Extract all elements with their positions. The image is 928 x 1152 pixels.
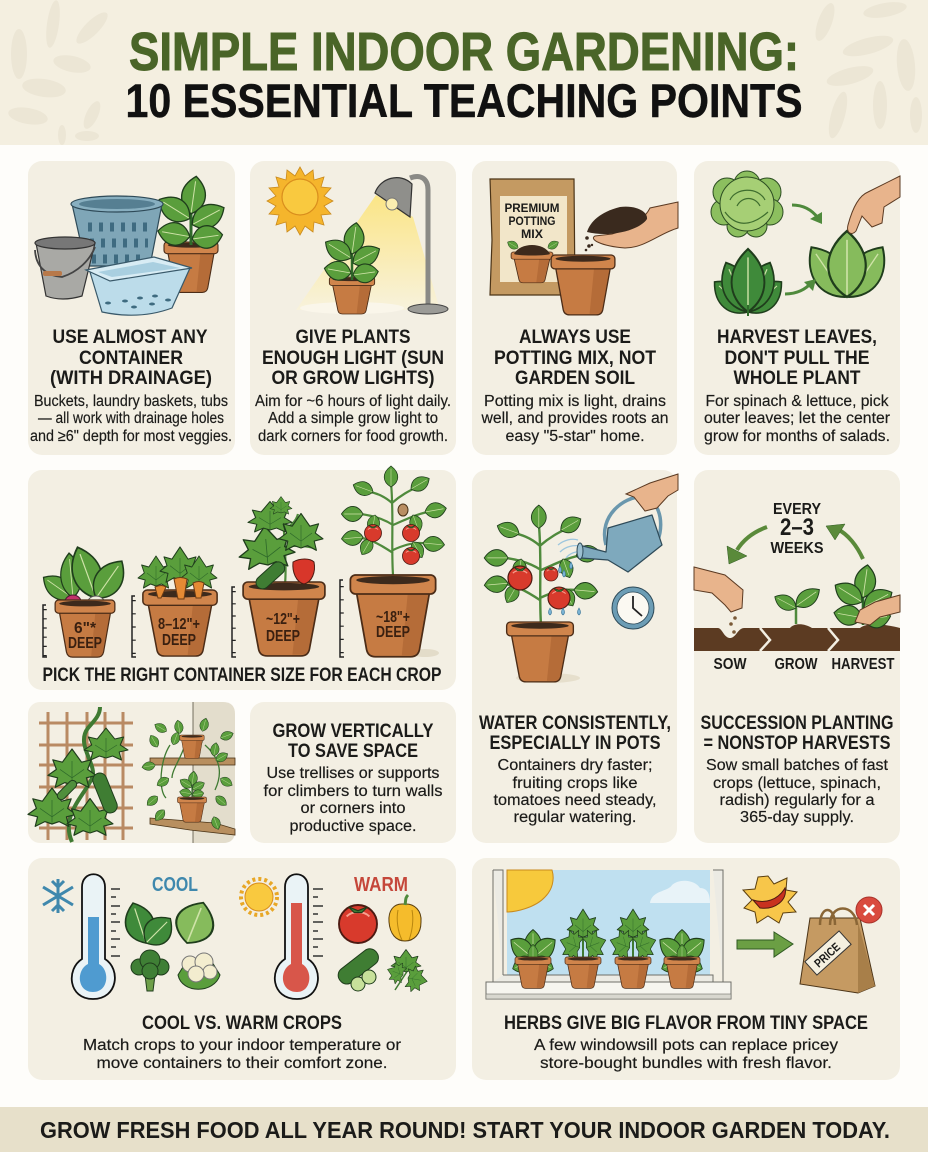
heading: = NONSTOP HARVESTS: [704, 733, 890, 754]
body text: and ≥6" depth for most veggies.: [30, 428, 232, 445]
pot: 8-12 inch: 8–12"+: [158, 616, 200, 633]
icon: window with herbs: [486, 870, 731, 999]
soil strip: [694, 624, 900, 651]
heading: GROW VERTICALLY: [272, 721, 434, 742]
body text: Containers dry faster;: [498, 757, 652, 774]
body text: Add a simple grow light to: [268, 410, 438, 427]
body text: [255, 393, 451, 445]
heading: CONTAINER: [79, 348, 183, 369]
icon: cool thermometer: [72, 874, 120, 999]
panel: succession planting: [694, 470, 900, 843]
icon: shopping bag with price tag: [800, 897, 882, 993]
pot: 12 inch: [232, 496, 325, 657]
icon: clock: [612, 587, 654, 629]
labels: sow grow harvest: [714, 656, 895, 673]
panel: harvest leaves: [694, 161, 900, 455]
heading: (WITH DRAINAGE): [50, 368, 212, 389]
body text: [534, 1037, 838, 1072]
arrow: lettuce to leaves: [792, 205, 822, 224]
labels: sow grow harvest: SOW: [714, 656, 747, 673]
icon: romaine leaves: [798, 231, 896, 306]
body text: Match crops to your indoor temperature or: [83, 1037, 401, 1054]
icon: broccoli: [131, 950, 169, 991]
body text: [83, 1037, 401, 1072]
body text: grow for months of salads.: [704, 428, 890, 445]
label: warm: WARM: [354, 874, 408, 896]
heading: TO SAVE SPACE: [288, 741, 418, 762]
heading: POTTING MIX, NOT: [494, 348, 656, 369]
icon: potting mix bag: [490, 179, 575, 295]
body text: 365-day supply.: [740, 809, 854, 826]
body text: or corners into: [300, 800, 406, 817]
icon: shelves with trailing plants: [141, 717, 235, 835]
label: every 2-3 weeks: [770, 501, 824, 557]
icon: sun: [267, 167, 333, 235]
heading: DON'T PULL THE: [724, 348, 870, 369]
body text: — all work with drainage holes: [38, 410, 224, 427]
icon: warm crops: [335, 895, 429, 994]
pot: 12 inch: DEEP: [266, 628, 300, 645]
label: cool: COOL: [152, 874, 198, 896]
heading: ALWAYS USE: [519, 327, 631, 348]
icon: laundry basket: [71, 196, 163, 266]
icon: floor lamp: [375, 176, 448, 314]
icon: tomato plant in pot: [484, 505, 601, 683]
body text: regular watering.: [514, 809, 636, 826]
pot: 6 inch: [38, 542, 133, 657]
icon: water spray arcs: [558, 539, 582, 558]
body text: productive space.: [290, 818, 416, 835]
body text: [480, 393, 668, 445]
body text: Aim for ~6 hours of light daily.: [255, 393, 451, 410]
body text: fruiting crops like: [512, 775, 638, 792]
icon: warm sun: [241, 879, 277, 915]
icon: watering can: [577, 497, 662, 572]
label: every 2-3 weeks: WEEKS: [770, 540, 824, 557]
pot: 8-12 inch: DEEP: [162, 632, 196, 649]
title line 1: SIMPLE INDOOR GARDENING:: [129, 22, 799, 82]
icon: water droplets: [548, 562, 580, 615]
icon: snowflake: [43, 879, 73, 913]
heading: OR GROW LIGHTS): [272, 368, 434, 389]
icon: spinach: [706, 249, 790, 321]
body text: [264, 765, 443, 835]
icon: hand holding can: [626, 474, 678, 511]
panel: any container: [28, 161, 235, 455]
label: every 2-3 weeks: EVERY: [773, 501, 822, 518]
heading: GIVE PLANTS: [296, 327, 410, 348]
heading: [272, 721, 434, 762]
heading: COOL VS. WARM CROPS: [142, 1013, 342, 1034]
icon: potting mix bag: PREMIUM: [504, 201, 560, 215]
body text: outer leaves; let the center: [704, 410, 890, 427]
body text: crops (lettuce, spinach,: [713, 775, 881, 792]
panel: light: [250, 161, 456, 455]
body text: [30, 393, 232, 445]
arrow: spinach to leaves: [785, 279, 816, 294]
heading: SUCCESSION PLANTING: [700, 713, 894, 734]
footer text: GROW FRESH FOOD ALL YEAR ROUND! START YOUR INDOOR GARDEN TODAY.: [40, 1117, 890, 1143]
label: every 2-3 weeks: 2–3: [780, 514, 814, 541]
body text: Buckets, laundry baskets, tubs: [34, 393, 228, 410]
footer banner: [0, 1107, 928, 1152]
heading: [717, 327, 877, 389]
icon: shopping bag with price tag: PRICE: [811, 940, 843, 970]
body text: radish) regularly for a: [720, 792, 875, 809]
heading: ENOUGH LIGHT (SUN: [262, 348, 444, 369]
heading: WHOLE PLANT: [734, 368, 861, 389]
pot: 18 inch: DEEP: [376, 624, 410, 641]
heading: [50, 327, 212, 389]
icon: lettuce head: [711, 171, 783, 237]
icon: chili flavor burst: [743, 876, 797, 923]
body text: [704, 393, 890, 445]
icon: potted plant: [153, 175, 229, 292]
heading: USE ALMOST ANY: [52, 327, 208, 348]
heading: HERBS GIVE BIG FLAVOR FROM TINY SPACE: [504, 1013, 868, 1034]
icon: potting mix bag: POTTING: [508, 214, 556, 228]
labels: sow grow harvest: HARVEST: [832, 656, 895, 673]
panel: potting mix: [472, 161, 678, 455]
heading: [262, 327, 444, 389]
body text: Use trellises or supports: [266, 765, 440, 782]
icon: potting mix bag: MIX: [521, 227, 543, 241]
heading: [700, 713, 894, 754]
pot: 8-12 inch: [132, 547, 217, 657]
icon: metal bucket: [35, 237, 95, 299]
pot: 12 inch: ~12"+: [266, 611, 300, 628]
title line 2: 10 ESSENTIAL TEACHING POINTS: [126, 74, 802, 127]
arrow: herbs to bag: [737, 932, 793, 957]
body text: move containers to their comfort zone.: [96, 1055, 388, 1072]
panel: cool vs warm: [28, 858, 456, 1080]
body text: easy "5-star" home.: [506, 428, 644, 445]
heading: [479, 713, 671, 754]
header banner: [0, 0, 928, 145]
panel: trellis illustration: [28, 702, 235, 843]
icon: warm thermometer: [275, 874, 323, 999]
pot: 6 inch: 6"*: [74, 620, 97, 637]
panel: water consistently: [472, 470, 678, 843]
panel: grow vertically: [250, 702, 456, 843]
heading: HARVEST LEAVES,: [717, 327, 877, 348]
decorative leaves left: [7, 0, 112, 145]
icon: sprout: [772, 583, 824, 624]
icon: mature plant and harvesting hand: [830, 564, 900, 630]
icon: plastic tub: [86, 257, 192, 315]
body text: Sow small batches of fast: [706, 757, 889, 774]
pot: 18 inch: [340, 466, 448, 657]
panel: container size: [28, 466, 456, 690]
body text: dark corners for food growth.: [258, 428, 448, 445]
body text: Potting mix is light, drains: [484, 393, 666, 410]
body text: For spinach & lettuce, pick: [706, 393, 889, 410]
body text: tomatoes need steady,: [494, 792, 656, 809]
icon: picking hand: [848, 176, 900, 233]
icon: large pot: [551, 255, 615, 315]
icon: trellis with cucumber vine: [28, 707, 133, 842]
labels: sow grow harvest: GROW: [774, 656, 818, 673]
icon: plant under lamp: [300, 221, 404, 314]
pot: 18 inch: ~18"+: [376, 609, 410, 626]
heading: PICK THE RIGHT CONTAINER SIZE FOR EACH CROP: [42, 665, 442, 686]
body text: [706, 757, 889, 826]
body text: for climbers to turn walls: [264, 783, 443, 800]
icon: cauliflower: [178, 953, 220, 989]
decorative leaves right: [812, 0, 922, 140]
icon: cool crops: [120, 896, 221, 991]
icon: light beam: [296, 195, 440, 310]
heading: GARDEN SOIL: [515, 368, 635, 389]
arrow: sow to harvest: [826, 524, 863, 559]
panel: herbs: [472, 858, 900, 1080]
heading: ESPECIALLY IN POTS: [490, 733, 660, 754]
pot: 6 inch: DEEP: [68, 635, 102, 652]
arrow: harvest to sow: [727, 527, 767, 564]
heading: WATER CONSISTENTLY,: [479, 713, 671, 734]
body text: store-bought bundles with fresh flavor.: [540, 1055, 832, 1072]
heading: [494, 327, 656, 389]
icon: hand with soil: [585, 202, 678, 251]
body text: [494, 757, 656, 826]
body text: A few windowsill pots can replace pricey: [534, 1037, 838, 1054]
body text: well, and provides roots an: [480, 410, 668, 427]
icon: sowing hand: [694, 567, 743, 634]
